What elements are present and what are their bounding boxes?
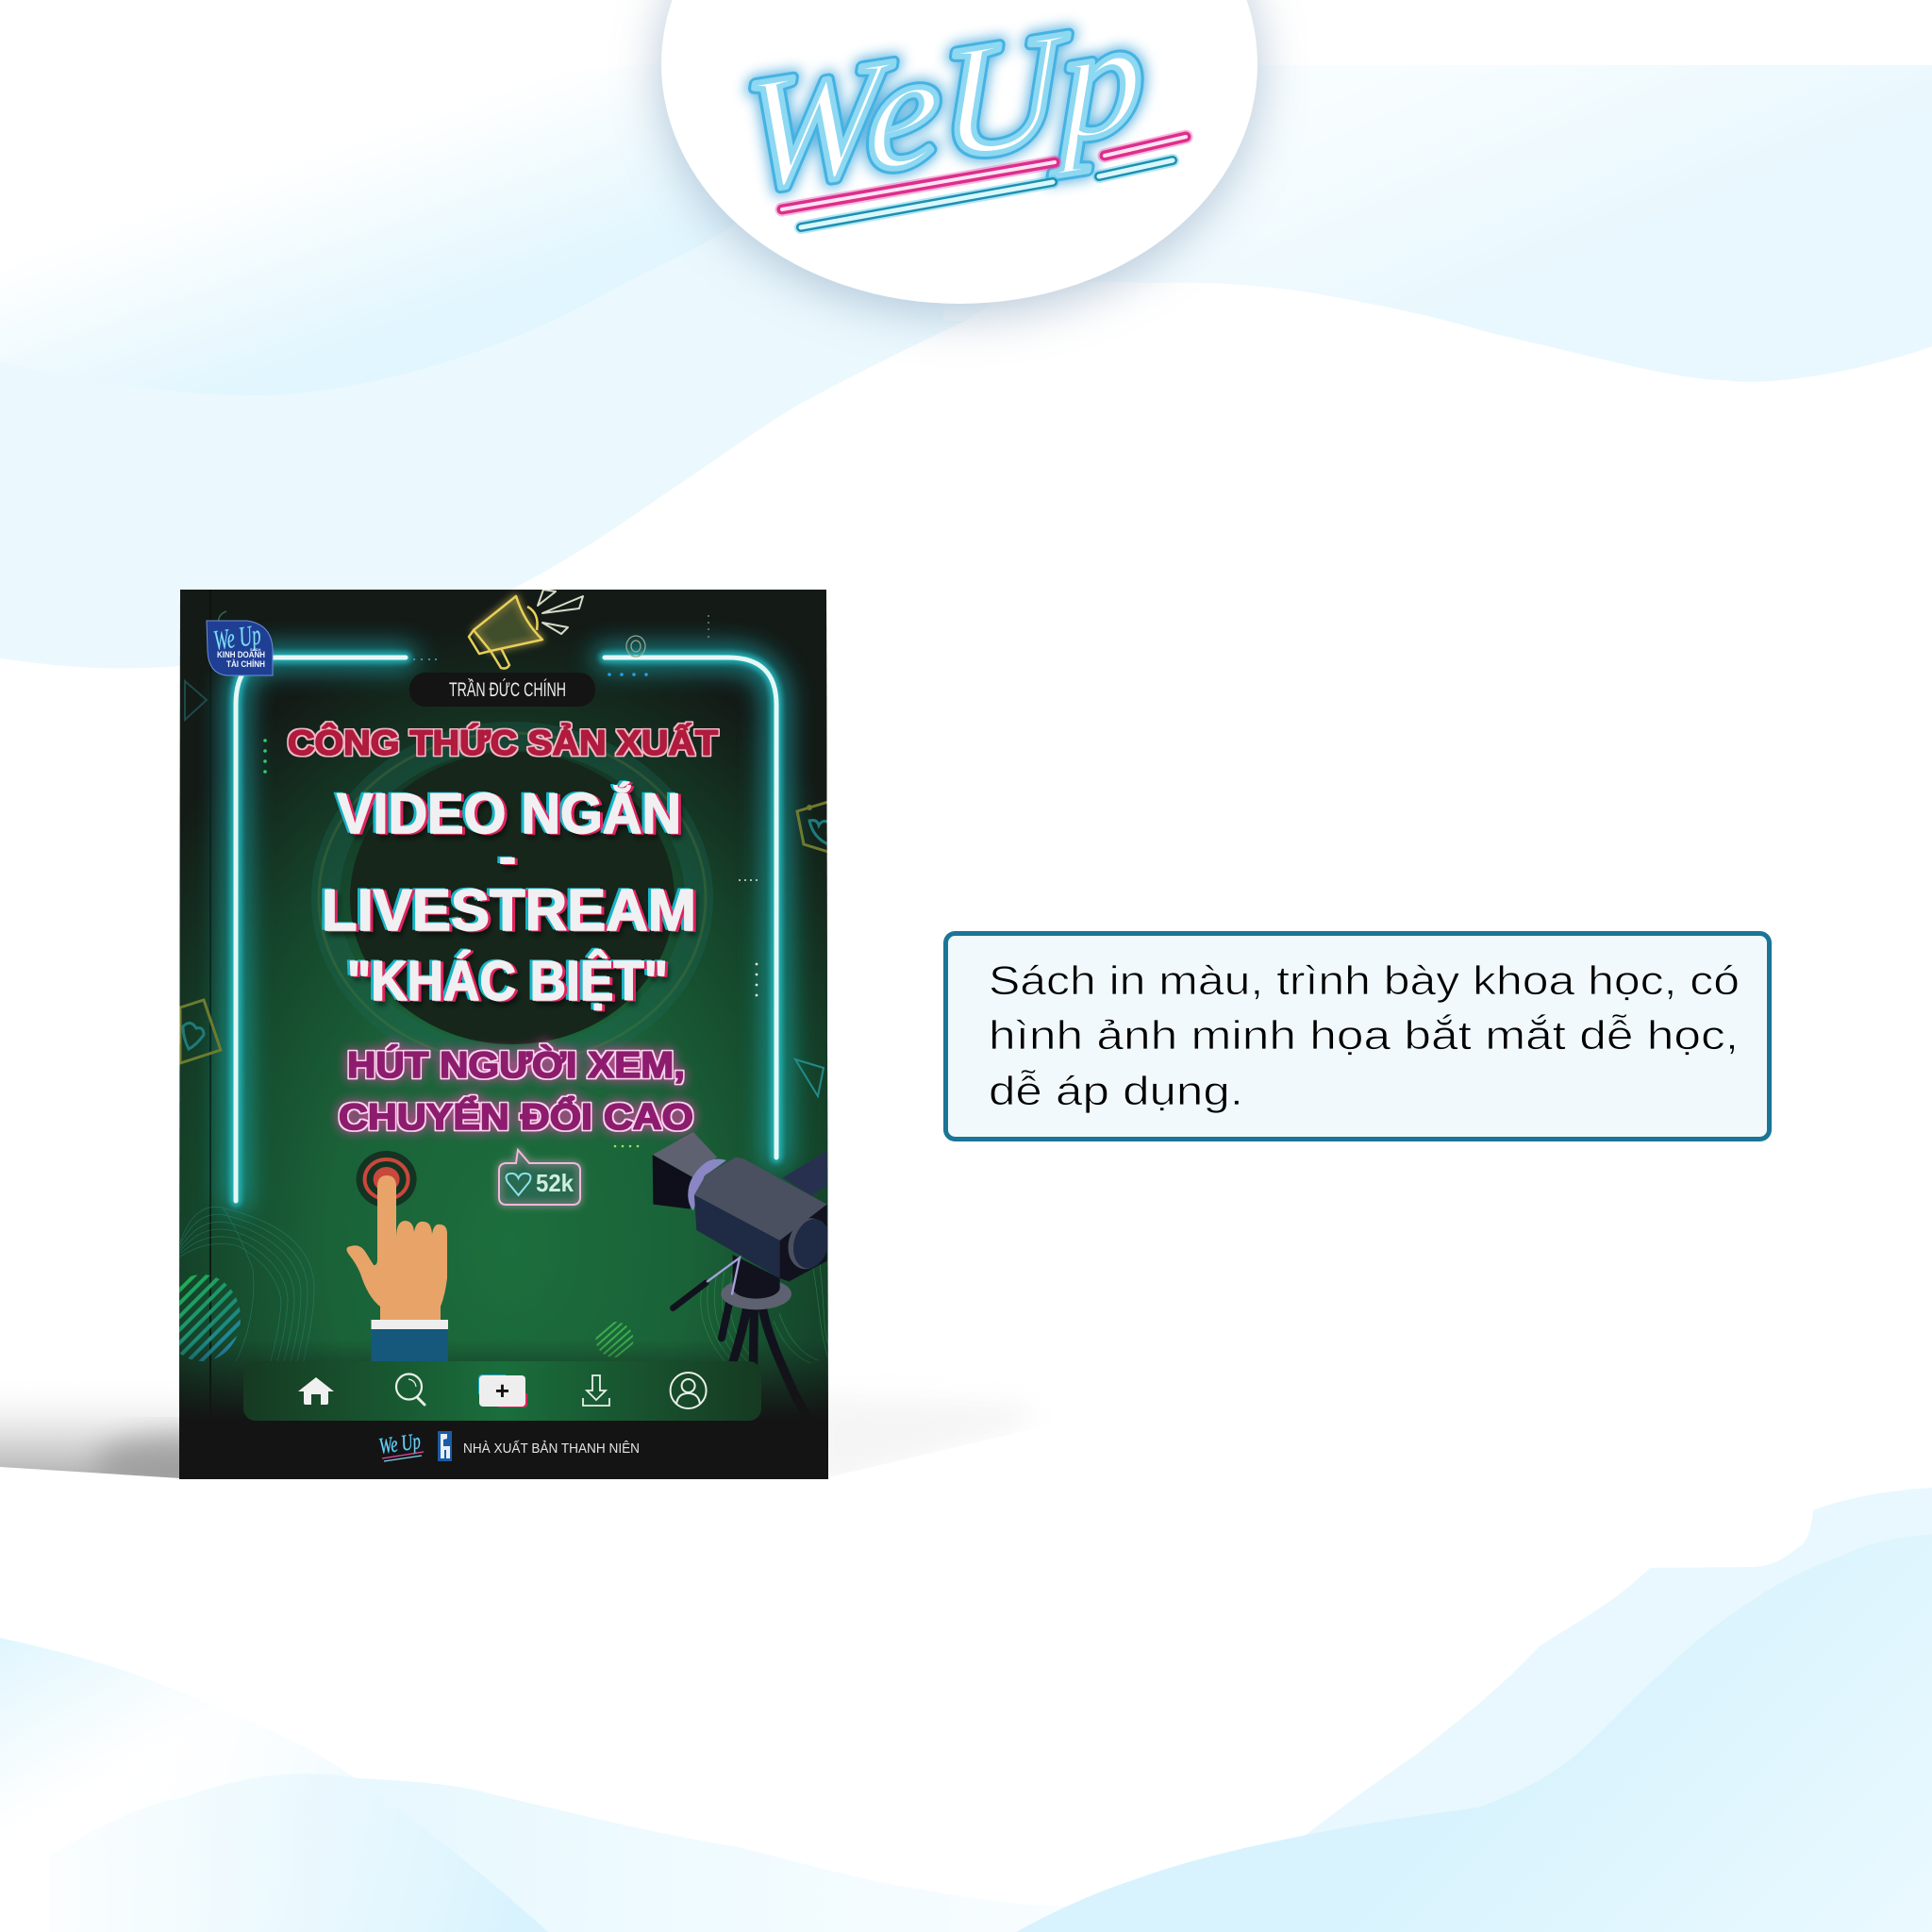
jacket sleeve	[372, 1329, 448, 1362]
subtitle line: CHUYỂN ĐỔI CAO: CHUYỂN ĐỔI CAO	[339, 1095, 693, 1138]
callout text: dễ áp dụng.	[989, 1069, 1243, 1114]
icon: yellow bag left	[180, 1000, 221, 1063]
icon: heart	[507, 1174, 530, 1195]
background wave: top-right	[943, 65, 1932, 382]
wave lines: left teal	[180, 1207, 314, 1361]
icon: create plus tile	[478, 1374, 527, 1407]
title dash: -	[498, 824, 517, 888]
background wave: bottom-left slope	[0, 1638, 548, 1932]
icon: home	[298, 1377, 334, 1405]
title line: VIDEO NGẮN: VIDEO NGẮN	[337, 782, 681, 845]
badge category line 1: KINH DOANH	[217, 650, 265, 660]
logo underline: pink short	[1105, 137, 1186, 156]
author pill: TRẦN ĐỨC CHÍNH	[449, 679, 566, 701]
button behind finger	[357, 1151, 417, 1208]
callout text	[989, 958, 1740, 1114]
like bubble	[499, 1150, 580, 1205]
hand	[346, 1175, 447, 1321]
icon: yellow bag right	[797, 802, 828, 852]
icon: pointing hand	[346, 1151, 448, 1362]
background wave: right deep band	[1016, 1534, 1932, 1932]
book shadow: right	[828, 1409, 984, 1470]
badge label: SÁCH	[250, 647, 260, 652]
background wave: right light band	[1016, 1488, 1932, 1932]
icon: download	[583, 1375, 609, 1406]
camera body	[694, 1158, 827, 1281]
subtitle line: HÚT NGƯỜI XEM: HÚT NGƯỜI XEM,	[347, 1044, 685, 1086]
shirt cuff	[372, 1320, 448, 1329]
title backdrop gear rings	[319, 733, 706, 1063]
logo underline: blue long	[801, 182, 1053, 227]
camera on tripod	[653, 1132, 828, 1407]
icon: megaphone	[469, 590, 583, 669]
camera lens	[789, 1218, 828, 1270]
camera handle	[673, 1257, 740, 1308]
icon: search	[396, 1374, 425, 1405]
hatch circle: bottom right	[775, 1424, 823, 1475]
publisher row	[377, 1429, 640, 1461]
background wave: top-left inner	[0, 64, 849, 395]
camera rear arm	[783, 1151, 827, 1195]
small We Up logo	[377, 1429, 424, 1461]
logo circle	[661, 0, 1257, 313]
camera lilac ring	[688, 1159, 726, 1210]
megaphone rays	[538, 590, 583, 634]
cover spine line	[209, 788, 211, 1404]
camera hood	[653, 1132, 717, 1209]
callout text: hình ảnh minh họa bắt mắt dễ học,	[989, 1013, 1739, 1058]
hatch circle: middle	[596, 1322, 634, 1357]
cover base	[177, 587, 830, 1483]
like count: 52k	[536, 1169, 574, 1197]
badge category line 2: TÀI CHÍNH	[226, 659, 265, 670]
logo underline: blue short	[1099, 160, 1173, 176]
book cover	[142, 587, 835, 1483]
icon: create plus tile: +	[495, 1376, 509, 1405]
tripod legs	[718, 1302, 806, 1407]
title line: LIVESTREAM: LIVESTREAM	[322, 878, 696, 943]
hatch circle: left	[179, 1274, 241, 1361]
bottom fade	[177, 1340, 830, 1481]
author pill	[409, 673, 595, 707]
cover green glow	[177, 587, 830, 1483]
book shadow: left	[0, 1407, 179, 1478]
publisher name: NHÀ XUẤT BẢN THANH NIÊN	[463, 1441, 640, 1457]
background wave: top-left outer	[0, 113, 966, 668]
publisher emblem	[438, 1431, 452, 1461]
background wave: bottom-left hill	[49, 1774, 1072, 1932]
callout box	[945, 934, 1770, 1140]
camera mount	[721, 1255, 791, 1309]
small We Up logo: We Up	[377, 1429, 422, 1459]
title backdrop dark circle	[350, 752, 675, 1044]
title line: KHÁC BIỆT: "KHÁC BIỆT"	[347, 949, 668, 1012]
badge logo: We Up	[211, 619, 262, 657]
title line: CÔNG THỨC SẢN XUẤT: CÔNG THỨC SẢN XUẤT	[288, 723, 718, 762]
bottom navigation bar	[243, 1361, 761, 1421]
icon: profile	[671, 1373, 707, 1408]
neon phone frame	[236, 658, 776, 1201]
wave lines: right green	[701, 1259, 828, 1363]
callout text: Sách in màu, trình bày khoa học, có	[989, 958, 1740, 1004]
small decorative dots and shapes	[185, 611, 824, 1147]
series badge	[207, 619, 273, 675]
logo underline: pink long	[782, 162, 1055, 209]
